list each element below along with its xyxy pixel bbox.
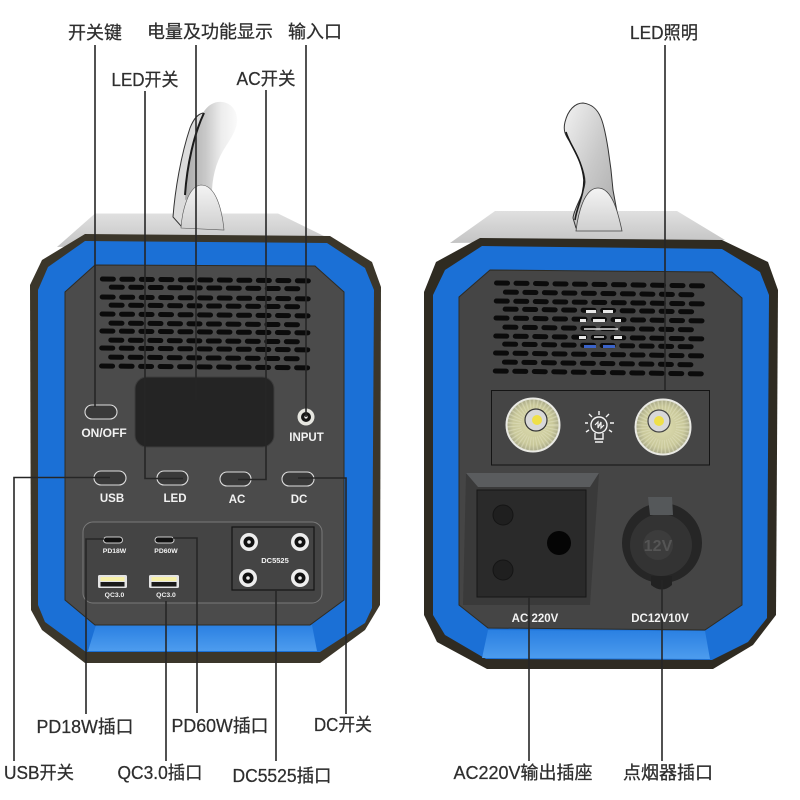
- label: LED开关: LED开关: [112, 70, 178, 90]
- LED lights group: [492, 390, 710, 465]
- blue bumper: front: [38, 241, 374, 652]
- button: USB: USB: [100, 493, 124, 505]
- ports: DC5525 group: [232, 527, 314, 590]
- button: ON/OFF: [81, 405, 127, 440]
- port: QC3.0 right: QC3.0: [156, 592, 176, 599]
- text: DC12V10V: DC12V10V: [631, 613, 689, 625]
- label: 电量及功能显示: 电量及功能显示: [147, 22, 273, 42]
- blue bumper bevel: back: [482, 630, 710, 659]
- face panel: front: [65, 265, 344, 625]
- handle: front: [173, 102, 237, 230]
- label: DC开关: DC开关: [314, 715, 372, 735]
- button: DC: [282, 472, 314, 506]
- cigarette lighter socket: [622, 497, 702, 590]
- vent grille: front: [102, 279, 312, 368]
- port: QC3.0 right: [149, 575, 179, 599]
- text: AC 220V: AC 220V: [512, 613, 559, 625]
- body outer shell: front: [30, 234, 381, 663]
- label: 输入口: 输入口: [288, 22, 342, 42]
- printed mark behind vents: [579, 310, 622, 348]
- label: PD60W插口: PD60W插口: [172, 716, 268, 736]
- button: LED: LED: [164, 493, 186, 505]
- label: PD18W插口: PD18W插口: [36, 717, 134, 737]
- button: LED: [157, 471, 188, 505]
- icon: light bulb: [585, 411, 614, 442]
- label: 开关键: 开关键: [68, 23, 122, 43]
- handle: back: [564, 103, 622, 231]
- port: PD18W: PD18W: [103, 548, 127, 555]
- label: LED照明: LED照明: [630, 23, 698, 43]
- display screen: [135, 377, 274, 447]
- port: QC3.0 left: QC3.0: [105, 592, 125, 599]
- port: INPUT: INPUT: [289, 432, 324, 444]
- button: DC: DC: [291, 494, 307, 506]
- AC socket: [463, 473, 599, 605]
- button: ON/OFF: ON/OFF: [81, 426, 127, 440]
- top face: front: [57, 214, 328, 247]
- body outer shell: back: [424, 238, 778, 669]
- label: 点烟器插口: 点烟器插口: [623, 763, 713, 783]
- button: AC: AC: [229, 494, 245, 506]
- cigarette lighter socket: 12V: [644, 538, 673, 555]
- label: QC3.0插口: QC3.0插口: [118, 763, 202, 783]
- leader lines: [14, 45, 665, 761]
- label: AC220V输出插座: AC220V输出插座: [454, 763, 592, 783]
- button: AC: [220, 472, 251, 506]
- port: QC3.0 left: [98, 575, 127, 599]
- ports: DC5525 group: DC5525: [261, 556, 289, 565]
- blue bumper bevel: front: [88, 625, 317, 651]
- port: PD60W: PD60W: [154, 548, 178, 555]
- panel: back view of power station: [424, 103, 778, 669]
- label: USB开关: USB开关: [4, 763, 74, 783]
- blue bumper: back: [433, 246, 769, 660]
- port: PD18W: [103, 537, 127, 555]
- port: INPUT: [289, 408, 324, 444]
- panel: front view of power station: [30, 102, 381, 663]
- button: USB: [94, 471, 126, 505]
- port panel: front: [83, 522, 322, 603]
- label: AC开关: AC开关: [236, 69, 296, 89]
- icon: LED lamp right: [636, 400, 690, 454]
- port: PD60W: [154, 537, 178, 555]
- icon: LED lamp left: [506, 398, 560, 452]
- face panel: back: [459, 270, 742, 630]
- vent grille: back: [495, 283, 706, 374]
- label: DC5525插口: DC5525插口: [232, 766, 332, 786]
- top face: back: [450, 211, 725, 243]
